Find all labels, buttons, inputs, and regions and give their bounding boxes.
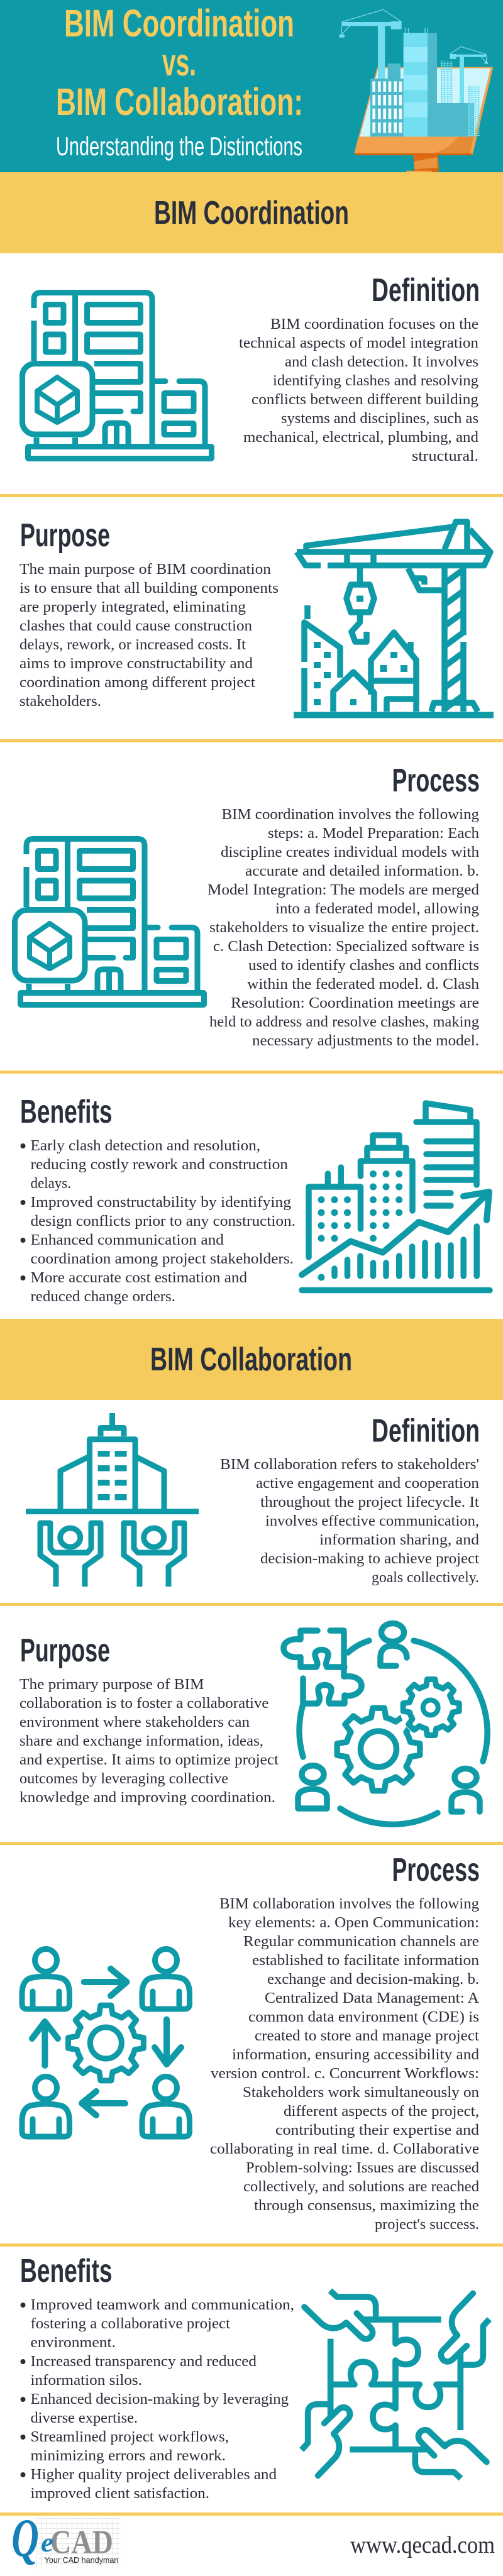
bullet list: benefits: Higher quality project deliverables and — [30, 2467, 277, 2483]
text block: process: version control. c. Concurrent Workflows: — [211, 2066, 479, 2082]
footer logo — [11, 2507, 121, 2568]
text block: purpose: coordination among different project — [19, 674, 255, 691]
text block: process: Regular communication channels are — [243, 1934, 479, 1950]
text block: process: information, ensuring accessibility and — [232, 2047, 479, 2063]
text block: process: common data environment (CDE) is — [248, 2009, 479, 2025]
text block: purpose: are properly integrated, eliminating — [19, 599, 246, 615]
text block: process: key elements: a. Open Communication: — [228, 1915, 479, 1931]
text block: definition: goals collectively. — [372, 1570, 479, 1586]
text block: definition: identifying clashes and resolving — [273, 373, 478, 389]
bullet list: benefits: Improved constructability by identifying — [30, 1194, 291, 1211]
panel: collaboration process — [22, 1852, 480, 2233]
text block: purpose: share and exchange information, ideas, — [19, 1733, 263, 1749]
text block: definition: systems and disciplines, such as — [281, 410, 478, 427]
bullet list: benefits: Enhanced communication and — [30, 1232, 224, 1248]
heading: benefits: Benefits — [20, 2253, 112, 2289]
text block: process: Model Integration: The models are merged — [207, 882, 479, 898]
bullet list: benefits: Improved teamwork and communication, — [30, 2297, 294, 2313]
text block: process: Stakeholders work simultaneously on — [243, 2084, 479, 2101]
footer logo: Q — [11, 2507, 39, 2568]
bullet list: benefits: Early clash detection and resolution, — [30, 1138, 260, 1154]
text block: process: into a federated model, allowing — [275, 901, 479, 917]
text block: process — [207, 806, 479, 1049]
icon: city skyline with rising chart — [302, 1103, 490, 1290]
bullet list: benefits: diverse expertise. — [30, 2410, 138, 2426]
text block: definition: mechanical, electrical, plumbing, and — [243, 429, 478, 446]
text block: process: Resolution: Coordination meetings are — [231, 995, 479, 1011]
bullet list: benefits: coordination among project stakeholders. — [30, 1251, 294, 1267]
bullet list: benefits: minimizing errors and rework. — [30, 2448, 226, 2464]
icon: four people around a gear — [22, 1949, 190, 2137]
text block: definition: throughout the project lifecycle. It — [260, 1494, 479, 1511]
text block: process: collaborating in real time. d. Collaborative — [210, 2141, 479, 2157]
text block: definition: active engagement and cooperation — [256, 1475, 479, 1492]
text block: purpose: and expertise. It aims to optimize project — [19, 1752, 279, 1768]
text block: purpose: stakeholders. — [19, 693, 101, 710]
section band: BIM Coordination: BIM Coordination — [154, 195, 349, 231]
text block: process: Problem-solving: Issues are discussed — [246, 2160, 479, 2176]
bullet list: benefits: More accurate cost estimation and — [30, 1270, 247, 1286]
text block: definition: and clash detection. It involves — [285, 354, 478, 370]
panel: collaboration purpose — [19, 1623, 487, 1824]
text block: process: BIM collaboration involves the following — [219, 1896, 479, 1912]
icon: hands holding puzzle pieces — [302, 2291, 489, 2479]
text block: process: necessary adjustments to the model. — [252, 1033, 479, 1049]
text block: process: contributing their expertise and — [275, 2122, 479, 2138]
title — [56, 2, 303, 123]
text block: purpose: The main purpose of BIM coordination — [19, 561, 271, 578]
panel: coordination purpose — [19, 517, 494, 718]
text block: purpose — [19, 1676, 279, 1806]
bullet list: benefits: fostering a collaborative project — [30, 2316, 230, 2332]
section band: BIM Collaboration — [0, 1319, 503, 1400]
text block: process: held to address and resolve clashes, making — [209, 1014, 479, 1030]
text block: process: project's success. — [375, 2216, 479, 2233]
heading: purpose: Purpose — [20, 517, 110, 554]
bullet list: benefits: reducing costly rework and construction — [30, 1157, 288, 1173]
bullet list: benefits: Increased transparency and reduced — [30, 2353, 257, 2370]
text block: process: within the federated model. d. Clash — [247, 976, 479, 993]
text block: purpose: The primary purpose of BIM — [19, 1676, 204, 1693]
footer logo: e — [41, 2528, 53, 2558]
heading: benefits: Benefits — [20, 1094, 112, 1130]
title: BIM Coordination — [64, 2, 294, 45]
bullet list: benefits: design conflicts prior to any construction. — [30, 1213, 296, 1230]
panel: coordination benefits — [20, 1094, 490, 1305]
text block: purpose: environment where stakeholders can — [19, 1714, 250, 1731]
bullet list: benefits — [20, 1138, 296, 1305]
text block: definition: BIM coordination focuses on the — [270, 316, 478, 333]
text block: purpose: delays, rework, or increased costs. It — [19, 637, 246, 653]
text block: purpose: is to ensure that all building components — [19, 580, 279, 597]
text block: process: used to identify clashes and conflicts — [248, 957, 479, 974]
footer logo: Your CAD handyman — [45, 2556, 118, 2565]
bullet list: benefits: information silos. — [30, 2372, 142, 2389]
panel: collaboration definition — [26, 1413, 480, 1587]
icon: people lifting a building — [26, 1413, 199, 1587]
text block: purpose: clashes that could cause construction — [19, 618, 252, 634]
bullet list: benefits: Enhanced decision-making by leveraging — [30, 2391, 289, 2408]
text block: purpose: knowledge and improving coordination. — [19, 1790, 275, 1806]
subtitle: Understanding the Distinctions — [56, 131, 302, 161]
bullet list: benefits: Streamlined project workflows, — [30, 2429, 229, 2445]
text block: purpose: aims to improve constructability and — [19, 656, 253, 672]
text block: definition: BIM collaboration refers to stakeholders' — [220, 1456, 479, 1473]
text block: process: c. Clash Detection: Specialized software is — [213, 938, 479, 955]
title: vs. — [162, 41, 196, 84]
text block: process: through consensus, maximizing the — [254, 2198, 479, 2214]
text block: process: collectively, and solutions are reached — [243, 2179, 479, 2195]
text block: process: stakeholders to visualize the entire project. — [209, 920, 479, 936]
text block: process — [210, 1896, 480, 2233]
text block: process: discipline creates individual models with — [221, 844, 479, 861]
text block: definition: decision-making to achieve project — [260, 1551, 479, 1567]
text block: definition — [220, 1456, 479, 1586]
panel: collaboration benefits — [20, 2253, 489, 2502]
text block: definition: information sharing, and — [319, 1532, 479, 1548]
text block: process: exchange and decision-making. b. — [267, 1971, 479, 1988]
bullet list: benefits: delays. — [30, 1175, 71, 1192]
panel: coordination definition — [23, 272, 480, 465]
text block: process: created to store and manage project — [255, 2028, 479, 2044]
panel: coordination process — [15, 762, 480, 1049]
section band: BIM Collaboration: BIM Collaboration — [150, 1341, 352, 1378]
bullet list: benefits: environment. — [30, 2335, 116, 2351]
footer logo: CAD — [50, 2523, 113, 2560]
text block: process: accurate and detailed information. b. — [245, 863, 479, 879]
icon: building with BIM cube — [23, 293, 211, 459]
icon: puzzle, gears and team circle — [284, 1623, 487, 1824]
text block: definition: structural. — [412, 448, 478, 465]
text block: definition — [239, 316, 478, 465]
text block: purpose: collaboration is to foster a collaborative — [19, 1695, 269, 1712]
icon: tower crane over houses — [294, 522, 494, 718]
bullet list: benefits — [20, 2297, 294, 2502]
text block: process: established to facilitate information — [252, 1952, 479, 1969]
heading: purpose: Purpose — [20, 1632, 110, 1669]
text block: purpose: outcomes by leveraging collective — [19, 1771, 228, 1787]
header band — [0, 0, 503, 172]
text block: process: Centralized Data Management: A — [265, 1990, 480, 2006]
text block: definition: technical aspects of model integration — [239, 335, 478, 351]
text block: process: different aspects of the project, — [284, 2103, 479, 2120]
title: BIM Collaboration: — [56, 80, 303, 123]
text block: definition: involves effective communication, — [265, 1513, 479, 1529]
bullet list: benefits: reduced change orders. — [30, 1289, 175, 1305]
text block: process: BIM coordination involves the following — [221, 806, 479, 823]
text block: purpose — [19, 561, 279, 710]
section band: BIM Coordination — [0, 172, 503, 253]
text block: process: steps: a. Model Preparation: Each — [268, 825, 479, 842]
icon: building with BIM cube — [15, 839, 204, 1005]
text block: definition: conflicts between different building — [252, 392, 478, 408]
icon: monitor with construction site — [339, 9, 493, 172]
bullet list: benefits: improved client satisfaction. — [30, 2485, 209, 2502]
